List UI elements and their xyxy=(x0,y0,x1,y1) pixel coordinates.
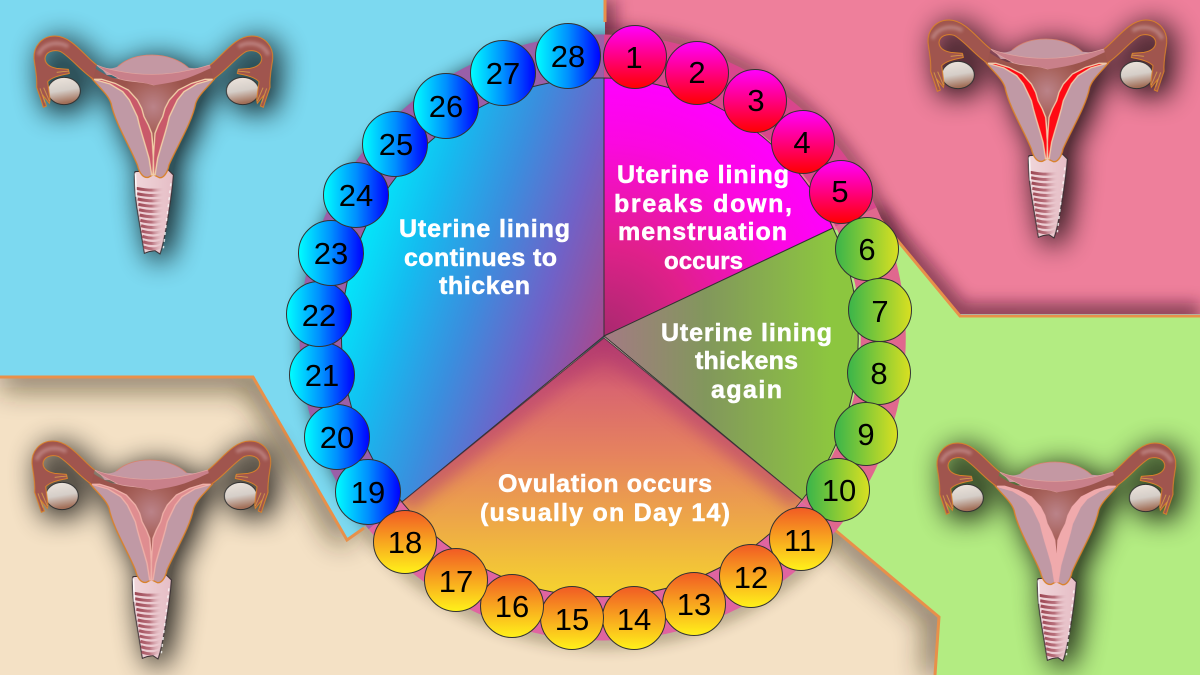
day numbers 1 to 28: 24 xyxy=(339,178,373,213)
wedge: lining breaks down xyxy=(604,78,833,336)
day numbers 1 to 28: 21 xyxy=(305,358,339,393)
label: menstruation: breaks down, xyxy=(614,190,792,218)
day numbers 1 to 28: 27 xyxy=(486,56,520,91)
wedge: ovulation xyxy=(402,338,802,597)
icon: uterus, bottom right, thin lining xyxy=(937,443,1182,666)
day numbers 1 to 28: 4 xyxy=(793,125,811,160)
label: ovulation: Ovulation occurs xyxy=(498,470,712,498)
day numbers 1 to 28: 22 xyxy=(302,298,336,333)
label: thickens again: again xyxy=(711,376,782,404)
wedge: uterine lining continues to thicken xyxy=(341,78,604,502)
label: menstruation: menstruation xyxy=(618,218,787,246)
day circles 11 to 18, orange xyxy=(374,508,832,650)
label: continues to thicken: continues to xyxy=(404,244,557,272)
day numbers 1 to 28: 12 xyxy=(734,560,768,595)
label: thickens again: thickens xyxy=(695,347,798,375)
wedge: lining thickens again xyxy=(604,228,858,500)
day numbers 1 to 28: 28 xyxy=(551,39,585,74)
label: ovulation: (usually on Day 14) xyxy=(480,499,730,527)
day numbers 1 to 28: 20 xyxy=(320,420,354,455)
day circles 6 to 10, green xyxy=(806,218,912,522)
panel: pink background, menstruation xyxy=(604,0,1200,314)
label: menstruation: Uterine lining xyxy=(617,161,789,189)
icon: uterus, top right, menstruating lining xyxy=(928,20,1173,243)
day circles 19 to 28, blue xyxy=(286,24,600,524)
day numbers 1 to 28: 3 xyxy=(747,83,765,118)
day numbers 1 to 28: 11 xyxy=(784,523,816,558)
label: continues to thicken: thicken xyxy=(439,272,530,300)
cycle wheel xyxy=(286,24,912,650)
day circles 1 to 5, red xyxy=(604,26,872,224)
day numbers 1 to 28: 7 xyxy=(871,294,889,329)
day numbers 1 to 28: 26 xyxy=(429,89,463,124)
panel: beige background, ovulation xyxy=(0,337,940,675)
day numbers 1 to 28: 2 xyxy=(688,55,706,90)
label: continues to thicken: Uterine lining xyxy=(399,215,570,243)
day numbers 1 to 28: 19 xyxy=(351,475,385,510)
day numbers 1 to 28: 13 xyxy=(677,587,711,622)
label: thickens again: Uterine lining xyxy=(661,319,832,347)
panel: green background, lining thickens again xyxy=(605,212,1200,675)
day numbers 1 to 28: 18 xyxy=(388,525,422,560)
day numbers 1 to 28: 10 xyxy=(822,473,856,508)
day numbers 1 to 28: 5 xyxy=(831,174,849,209)
day numbers 1 to 28: 25 xyxy=(379,127,413,162)
day numbers 1 to 28: 9 xyxy=(857,417,875,452)
day numbers 1 to 28: 16 xyxy=(495,589,529,624)
day numbers 1 to 28: 15 xyxy=(555,602,589,637)
day numbers 1 to 28: 14 xyxy=(617,602,651,637)
day numbers 1 to 28 xyxy=(302,39,889,637)
day numbers 1 to 28: 23 xyxy=(314,236,348,271)
day numbers 1 to 28: 6 xyxy=(858,232,876,267)
shadow around wheel xyxy=(300,34,906,640)
day numbers 1 to 28: 8 xyxy=(870,356,888,391)
label: menstruation: occurs xyxy=(664,248,743,275)
day numbers 1 to 28: 1 xyxy=(625,40,643,75)
ring band behind day circles xyxy=(322,57,883,618)
icon: uterus, bottom left, ovulation lining xyxy=(32,441,277,664)
icon: uterus, top left, thickening lining xyxy=(34,36,279,259)
day numbers 1 to 28: 17 xyxy=(439,564,473,599)
